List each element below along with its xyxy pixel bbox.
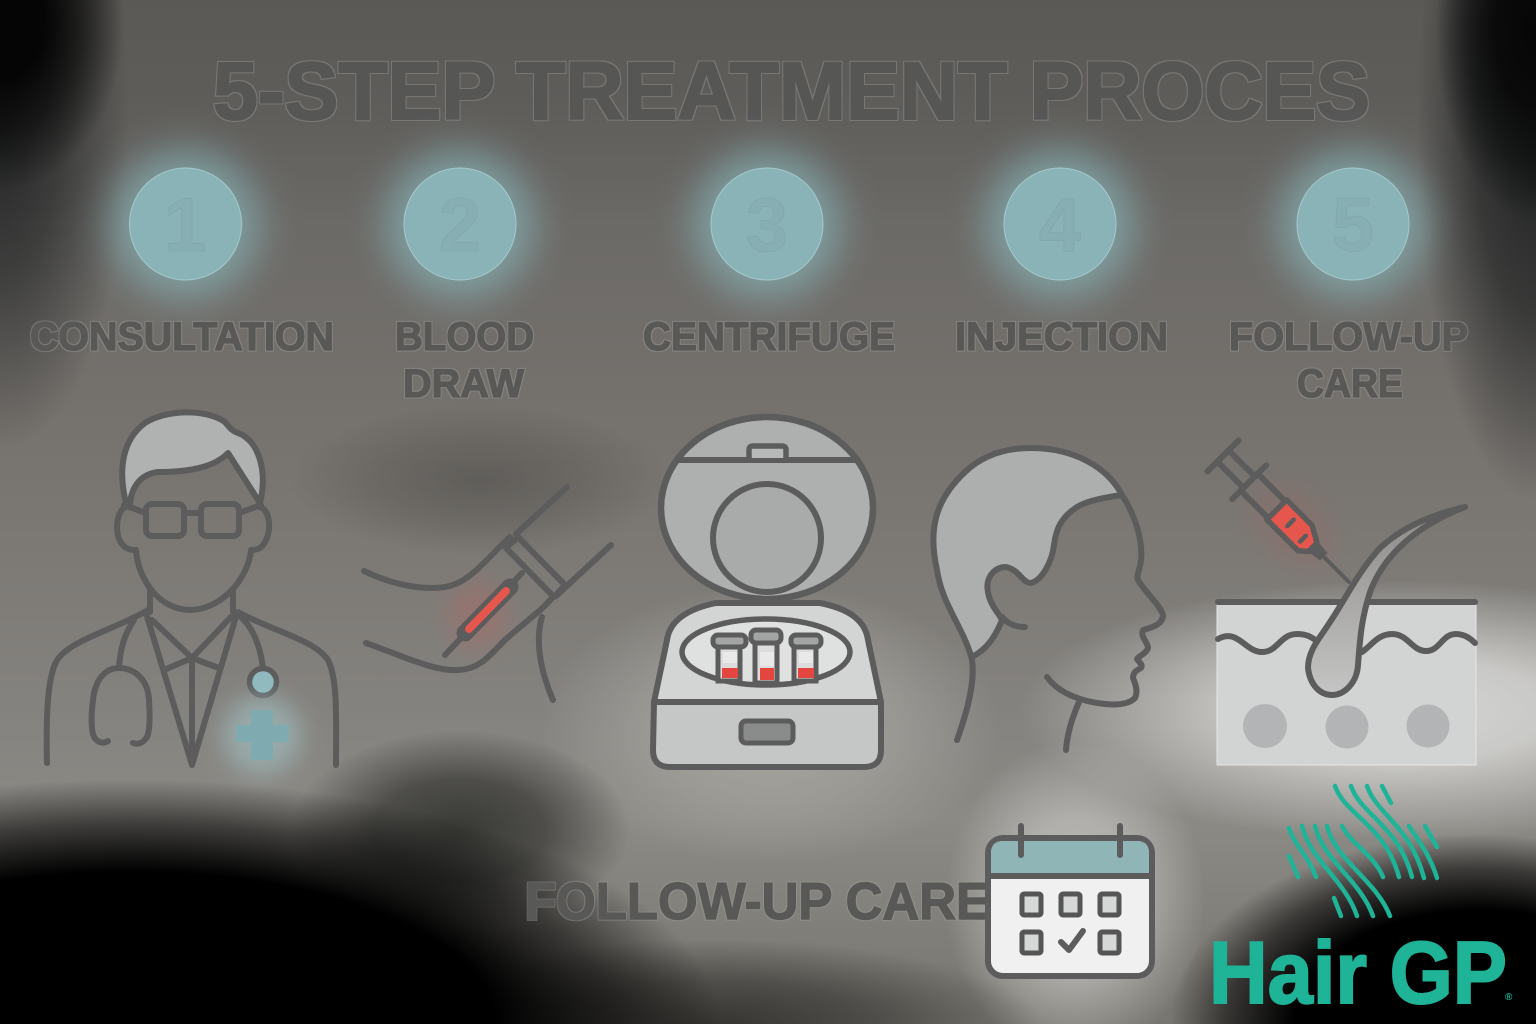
step 2: number badge: 2 (439, 183, 481, 268)
logo: Hair GP wordmark: Hair GP (1209, 923, 1507, 1022)
step 5 label: FOLLOW-UP (1229, 315, 1468, 359)
icon: arm with blood draw (364, 487, 611, 700)
heading: follow-up care: FOLLOW-UP CARE (525, 873, 990, 931)
step 2 label: DRAW (403, 362, 524, 406)
logo: Hair GP wordmark: ® (1505, 992, 1513, 1003)
icon: calendar (988, 826, 1152, 976)
step 2 label (395, 315, 534, 406)
step 4: number badge (986, 150, 1134, 298)
step 1 label: CONSULTATION (30, 315, 334, 359)
step 1: number badge: 1 (164, 183, 206, 268)
step 5 label: CARE (1297, 362, 1403, 406)
title: 5-STEP TREATMENT PROCES (213, 46, 1370, 137)
step 2 label: BLOOD (395, 315, 534, 359)
icon: skin cross-section with hair follicle (1217, 507, 1476, 765)
step 3: number badge: 3 (746, 183, 788, 268)
step 4: number badge: 4 (1039, 183, 1081, 268)
step 3 label: CENTRIFUGE (643, 315, 895, 359)
step 5: number badge (1279, 150, 1427, 298)
step 2: number badge (386, 150, 534, 298)
icon: centrifuge (653, 417, 881, 767)
logo: hair strands mark (1289, 786, 1437, 916)
step 3: number badge (693, 150, 841, 298)
icon: syringe (1199, 432, 1373, 606)
icon: medical cross (222, 695, 302, 775)
step 5 label (1229, 315, 1468, 406)
step 4 label: INJECTION (955, 315, 1168, 359)
step 5: number badge: 5 (1332, 183, 1374, 268)
step 1: number badge (112, 150, 260, 298)
icon: head profile (933, 448, 1163, 750)
icon: doctor (47, 412, 336, 765)
